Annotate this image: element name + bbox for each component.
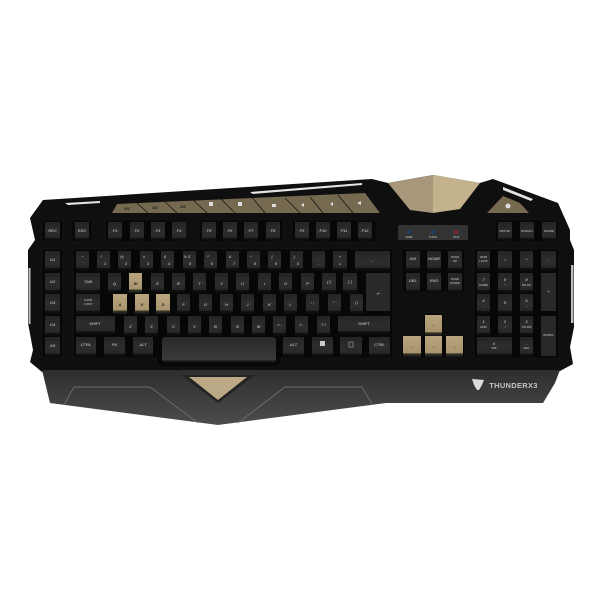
- QWERTY row keys: } ]: [347, 279, 353, 284]
- ThunderX3 logo: THUNDERX3: [489, 381, 538, 390]
- function row keys: PAUSE: [544, 229, 555, 233]
- numeric keypad: 2: [503, 319, 507, 324]
- navigation cluster: [406, 251, 462, 293]
- arrow keys: ↑: [432, 323, 434, 328]
- home row keys: G: [204, 302, 207, 307]
- number row keys: ): [292, 254, 295, 259]
- numeric keypad: .: [526, 341, 527, 346]
- bottom row keys: CTRL: [374, 342, 385, 347]
- home row keys: L: [289, 302, 292, 307]
- navigation cluster: INS: [410, 256, 417, 261]
- number row keys: `: [82, 261, 84, 266]
- function row keys: F9: [300, 228, 305, 233]
- LED panel: NUM: [406, 235, 413, 239]
- numeric keypad: /: [503, 257, 506, 262]
- shift row keys: V: [193, 324, 196, 329]
- number row keys: =: [339, 261, 342, 266]
- numeric keypad: NUM: [480, 255, 487, 259]
- home row keys: J: [246, 302, 249, 307]
- navigation cluster: END: [430, 278, 438, 283]
- media key strip: M2: [152, 205, 159, 210]
- home row keys: : ;: [311, 300, 315, 305]
- number row keys: 4: [167, 261, 171, 266]
- function row keys: F6: [228, 228, 233, 233]
- function row keys: ESC: [78, 228, 86, 233]
- LED panel: SCR: [453, 235, 460, 239]
- navigation cluster: DEL: [409, 278, 418, 283]
- QWERTY row keys: Q: [113, 281, 117, 286]
- shift row keys: [76, 316, 390, 336]
- deck outlines: [64, 387, 372, 423]
- function row keys: F11: [341, 228, 348, 233]
- numeric keypad: 4: [481, 298, 485, 303]
- numeric keypad: [477, 251, 556, 357]
- number row keys: !: [100, 254, 102, 259]
- gold crown: [388, 175, 480, 213]
- numeric keypad: PG DN: [522, 325, 532, 329]
- QWERTY row keys: O: [284, 281, 288, 286]
- navigation cluster: DOWN: [450, 281, 461, 285]
- number row keys: -: [318, 261, 320, 266]
- media key strip: M3: [180, 204, 187, 209]
- numeric keypad: INS: [491, 346, 497, 350]
- function row keys: F4: [177, 228, 182, 233]
- numeric keypad: 6: [525, 298, 528, 303]
- shift row keys: N: [236, 324, 239, 329]
- home row keys: " ': [333, 300, 338, 305]
- function row keys: F3: [156, 228, 161, 233]
- number row keys: ←: [370, 258, 374, 263]
- macro keys: [45, 251, 60, 357]
- LED panel: [398, 225, 468, 240]
- macro keys: G4: [50, 322, 56, 327]
- number row keys: +: [339, 254, 342, 259]
- number row keys: 2: [124, 261, 128, 266]
- bottom row keys: FN: [112, 342, 117, 347]
- key wells: [42, 220, 559, 367]
- number row keys: ^: [207, 254, 210, 259]
- shift row keys: SHIFT: [358, 321, 370, 326]
- number row keys: ~: [81, 254, 84, 259]
- media key strip: [112, 193, 380, 213]
- QWERTY row keys: [76, 273, 390, 311]
- number row keys: (: [271, 254, 273, 259]
- numeric keypad: 5: [504, 300, 507, 305]
- home row keys: A: [118, 302, 122, 307]
- navigation cluster: HOME: [428, 256, 440, 261]
- navigation cluster: UP: [453, 259, 457, 263]
- macro keys: G2: [50, 279, 56, 284]
- QWERTY row keys: ↵: [376, 291, 380, 296]
- function row keys: PRT SC: [500, 229, 511, 233]
- home row keys: S: [141, 302, 144, 307]
- numeric keypad: ↑: [504, 282, 506, 287]
- palm deck: [42, 370, 560, 425]
- numeric keypad: 3: [525, 319, 528, 324]
- function row keys: REC: [48, 228, 57, 233]
- QWERTY row keys: E: [156, 281, 159, 286]
- number row keys: 3: [147, 261, 150, 266]
- number row keys: $: [163, 254, 167, 259]
- bottom row keys: ALT: [138, 342, 147, 347]
- QWERTY row keys: W: [134, 281, 139, 286]
- shift row keys: Z: [128, 324, 132, 329]
- function row keys: F2: [135, 228, 140, 233]
- function row keys: F8: [271, 228, 276, 233]
- macro keys: G5: [50, 343, 56, 348]
- shift row keys: ? /: [321, 322, 327, 327]
- profile button: [487, 196, 529, 213]
- navigation cluster: PAGE: [451, 277, 460, 281]
- numeric keypad: →: [524, 303, 528, 308]
- bottom row keys: CTRL: [81, 342, 92, 347]
- media key strip: M1: [124, 206, 131, 211]
- number row keys: 9: [275, 261, 278, 266]
- number row keys: 1: [104, 261, 107, 266]
- numeric keypad: 7: [482, 277, 485, 282]
- number row keys: % €: [184, 254, 191, 259]
- number row keys: @: [120, 254, 124, 259]
- QWERTY row keys: P: [306, 281, 309, 286]
- number row keys: _: [316, 254, 320, 259]
- arrow keys: ↓: [432, 344, 434, 349]
- numeric keypad: ←: [482, 303, 486, 308]
- home row keys: CAPS: [84, 298, 92, 302]
- bottom row keys: [76, 337, 390, 363]
- shift row keys: SHIFT: [89, 321, 101, 326]
- number row keys: 5: [189, 261, 192, 266]
- numeric keypad: ↓: [504, 324, 506, 329]
- number row keys: [76, 251, 390, 271]
- home row keys: F: [182, 302, 185, 307]
- function row keys: F7: [249, 228, 254, 233]
- number row keys: &: [229, 254, 232, 259]
- function row keys: SCROLL: [521, 229, 533, 233]
- LED panel: CAPS: [429, 235, 437, 239]
- numeric keypad: 0: [493, 341, 496, 346]
- QWERTY row keys: U: [241, 281, 244, 286]
- arrow keys: →: [452, 344, 456, 349]
- QWERTY row keys: I: [264, 281, 266, 286]
- numeric keypad: DEL: [524, 346, 530, 350]
- function row keys: F10: [320, 228, 327, 233]
- accent bars: [28, 183, 574, 324]
- shift row keys: B: [214, 324, 217, 329]
- QWERTY row keys: Y: [220, 281, 223, 286]
- function row keys: [45, 222, 556, 241]
- numeric keypad: HOME: [479, 283, 489, 287]
- numeric keypad: *: [526, 257, 528, 262]
- number row keys: 8: [254, 261, 257, 266]
- home row keys: | \: [355, 300, 359, 305]
- bottom row keys: ALT: [289, 342, 298, 347]
- keyboard body: [28, 175, 574, 425]
- number row keys: 7: [233, 261, 236, 266]
- shift row keys: C: [172, 324, 175, 329]
- function row keys: F5: [207, 228, 212, 233]
- function row keys: F1: [113, 228, 118, 233]
- home row keys: D: [162, 302, 165, 307]
- shift row keys: > .: [299, 322, 304, 327]
- numeric keypad: LOCK: [479, 259, 489, 263]
- home row keys: K: [268, 302, 272, 307]
- numeric keypad: PG UP: [522, 283, 531, 287]
- ThunderX3 logo: [472, 379, 538, 390]
- numeric keypad: END: [480, 325, 487, 329]
- home row keys: H: [225, 302, 228, 307]
- QWERTY row keys: T: [198, 281, 201, 286]
- number row keys: *: [250, 254, 252, 259]
- numeric keypad: -: [548, 257, 550, 262]
- shift row keys: M: [257, 324, 261, 329]
- home row keys: [76, 294, 363, 314]
- QWERTY row keys: { [: [327, 279, 332, 284]
- number row keys: 0: [297, 261, 300, 266]
- numeric keypad: 1: [482, 319, 485, 324]
- numeric keypad: 8: [504, 277, 507, 282]
- gold wedge: [181, 375, 255, 403]
- shift row keys: < ,: [277, 322, 282, 327]
- home row keys: LOCK: [84, 302, 93, 306]
- function row keys: F12: [362, 228, 369, 233]
- arrow keys: ←: [410, 344, 414, 349]
- navigation cluster: PAGE: [451, 255, 460, 259]
- number row keys: #: [143, 254, 146, 259]
- macro keys: G3: [50, 300, 56, 305]
- number row keys: 6: [211, 261, 214, 266]
- QWERTY row keys: TAB: [84, 279, 92, 284]
- QWERTY row keys: R: [177, 281, 180, 286]
- macro keys: G1: [50, 257, 56, 262]
- arrow keys: [403, 315, 463, 357]
- numeric keypad: +: [547, 289, 550, 294]
- shift row keys: X: [149, 324, 153, 329]
- numeric keypad: ENTER: [543, 333, 554, 337]
- numeric keypad: 9: [525, 277, 528, 282]
